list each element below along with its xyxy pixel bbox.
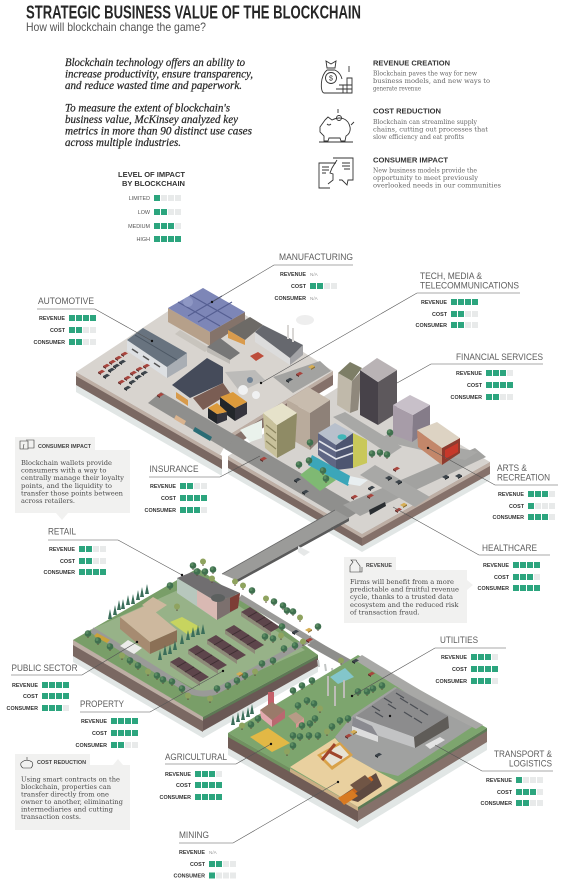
intro text block: Blockchain technology offers an ability to xyxy=(65,57,245,69)
level of impact legend: LIMITED xyxy=(129,196,150,202)
building: manufacturing blue roof plant xyxy=(168,288,245,346)
panel: property: REVENUE xyxy=(81,719,107,725)
island: residential and public sector xyxy=(73,568,355,738)
callout: revenue: ecosystem and the reduced risk xyxy=(350,601,459,609)
panel: transport and logistics: TRANSPORT & xyxy=(494,749,552,759)
car park: automotive vehicles xyxy=(98,352,150,391)
island: finance and city xyxy=(225,380,490,552)
panel: manufacturing: REVENUE xyxy=(280,272,306,278)
panel: manufacturing: N/A xyxy=(310,272,319,277)
residential trees xyxy=(85,558,321,703)
callout: consumer impact: CONSUMER IMPACT xyxy=(38,444,92,450)
intro text block: metrics in more than 90 distinct use cases xyxy=(65,126,253,138)
callout: cost reduction: intermediaries and cutting xyxy=(21,806,114,814)
callout: consumer impact: across retailers. xyxy=(21,497,75,505)
panel: transport and logistics: REVENUE xyxy=(486,778,512,784)
panel: agricultural: CONSUMER xyxy=(160,795,191,801)
panel: agricultural: COST xyxy=(176,783,192,789)
building: financial towers xyxy=(337,358,430,442)
level of impact legend xyxy=(118,170,186,243)
panel: transport and logistics: CONSUMER xyxy=(481,801,512,807)
leader lines xyxy=(11,265,558,843)
panel: transport and logistics: COST xyxy=(497,790,513,796)
cost reduction legend: chains, cutting out processes that xyxy=(373,126,488,134)
panel: financial services: CONSUMER xyxy=(451,395,482,401)
building: tan office and beige tower xyxy=(263,387,330,458)
building: hospital xyxy=(308,423,368,486)
consumer impact legend: overlooked needs in our communities xyxy=(373,182,502,190)
panel: tech, media and telecommunications: TELECOMMUNICATIONS xyxy=(420,280,519,290)
level of impact legend: BY BLOCKCHAIN xyxy=(122,179,185,188)
panel: agricultural: REVENUE xyxy=(165,772,191,778)
panel: utilities: UTILITIES xyxy=(440,635,478,645)
level of impact legend: LOW xyxy=(138,210,151,216)
intro text block: business value, McKinsey analyzed key xyxy=(65,114,239,126)
icon: money bag xyxy=(321,61,352,93)
panel: utilities: COST xyxy=(452,667,468,673)
housing rows xyxy=(170,607,280,686)
panel: manufacturing: MANUFACTURING xyxy=(279,252,353,262)
revenue creation legend: business models, and new ways to xyxy=(373,77,490,85)
bridge: city to residential xyxy=(222,510,349,583)
callout: revenue: REVENUE xyxy=(366,563,393,569)
building: dark warehouse xyxy=(172,358,230,410)
panel: public sector: CONSUMER xyxy=(7,706,38,712)
panel: manufacturing: N/A xyxy=(310,296,319,301)
callout: revenue: predictable and fruitful revenue xyxy=(350,586,459,594)
cost reduction legend: Blockchain can streamline supply xyxy=(373,118,477,126)
panel: manufacturing: CONSUMER xyxy=(275,296,306,302)
panel: mining: N/A xyxy=(209,850,218,855)
callout: cost reduction: COST REDUCTION xyxy=(37,760,86,766)
intro text block: and reduce wasted time and paperwork. xyxy=(65,80,242,92)
panel: healthcare xyxy=(478,543,540,592)
panel: insurance: INSURANCE xyxy=(150,464,198,474)
panel: public sector: COST xyxy=(23,694,39,700)
icon: money bag: $ xyxy=(329,76,333,82)
callout: consumer impact: transfer those points between xyxy=(21,490,124,498)
panel: retail: RETAIL xyxy=(48,526,76,536)
icon: consumer speech bubbles xyxy=(319,158,353,188)
panel: property: COST xyxy=(92,731,108,737)
callout: consumer impact xyxy=(15,437,130,520)
callout: consumer impact: Blockchain wallets provide xyxy=(21,459,112,467)
panel: insurance: CONSUMER xyxy=(145,508,176,514)
callout: revenue: cycle, thanks to a trusted data xyxy=(350,593,453,601)
level of impact legend: HIGH xyxy=(137,237,150,243)
building: logistics warehouse xyxy=(345,688,449,758)
panel: public sector xyxy=(7,663,78,712)
consumer impact legend: New business models provide the xyxy=(373,166,477,174)
mining machinery xyxy=(317,742,372,805)
callout: cost reduction: transaction costs. xyxy=(21,813,81,821)
panel: arts and recreation: CONSUMER xyxy=(493,515,524,521)
title: STRATEGIC BUSINESS VALUE OF THE BLOCKCHAIN xyxy=(26,2,361,22)
callout: consumer impact: points, and the liquidity to xyxy=(21,482,112,490)
callout: revenue: of transaction fraud. xyxy=(350,608,420,616)
panel: financial services: REVENUE xyxy=(456,371,482,377)
city trees and traffic xyxy=(174,415,462,515)
panel: arts and recreation xyxy=(493,463,555,521)
panel: public sector: PUBLIC SECTOR xyxy=(12,663,78,673)
panel: retail: COST xyxy=(60,559,76,565)
panel: automotive: COST xyxy=(50,328,66,334)
panel: public sector: REVENUE xyxy=(12,683,38,689)
intro text block: increase productivity, ensure transparency, xyxy=(65,68,253,80)
panel: healthcare: COST xyxy=(494,575,510,581)
panel: utilities: CONSUMER xyxy=(436,679,467,685)
panel: transport and logistics xyxy=(481,749,552,807)
panel: agricultural: AGRICULTURAL xyxy=(165,752,227,762)
panel: arts and recreation: COST xyxy=(509,504,525,510)
building: orange storage blocks xyxy=(208,392,247,424)
panel: arts and recreation: ARTS & xyxy=(497,463,527,473)
level of impact legend: LEVEL OF IMPACT xyxy=(118,170,186,179)
building: retail strip xyxy=(177,572,240,620)
panel: retail: CONSUMER xyxy=(44,570,75,576)
panel: automotive xyxy=(34,296,96,346)
consumer impact legend: opportunity to meet previously xyxy=(373,174,478,182)
panel: insurance xyxy=(145,464,207,514)
intro text block xyxy=(65,57,253,149)
panel: transport and logistics: LOGISTICS xyxy=(509,758,552,768)
panel: insurance: COST xyxy=(161,496,177,502)
intro text block: To measure the extent of blockchain's xyxy=(65,102,231,114)
intro text block: across multiple industries. xyxy=(65,137,181,149)
building: public sector school xyxy=(94,597,200,654)
panel: financial services: COST xyxy=(467,383,483,389)
revenue creation legend: Blockchain paves the way for new xyxy=(373,70,477,78)
revenue creation legend: generate revenue xyxy=(373,84,421,92)
callout: revenue xyxy=(344,557,473,623)
island: agriculture, mining, utilities and logistics xyxy=(228,655,487,829)
panel: financial services: FINANCIAL SERVICES xyxy=(456,352,543,362)
cost reduction legend: slow efficiency and eat profits xyxy=(373,133,465,141)
callout: revenue: Firms will benefit from a more xyxy=(350,578,454,586)
subtitle: How will blockchain change the game? xyxy=(26,20,206,34)
island: automotive and manufacturing xyxy=(76,288,333,476)
revenue creation legend xyxy=(373,58,490,92)
panel: tech, media and telecommunications: CONSUMER xyxy=(416,323,447,329)
consumer impact legend xyxy=(373,156,502,190)
consumer impact legend: CONSUMER IMPACT xyxy=(373,156,449,164)
building: factory with chimneys xyxy=(157,315,315,399)
panel: mining: CONSUMER xyxy=(174,874,205,880)
panel: tech, media and telecommunications: COST xyxy=(432,312,448,318)
panel: tech, media and telecommunications: TECH, MEDIA & xyxy=(420,271,482,281)
cost reduction legend: COST REDUCTION xyxy=(373,106,441,116)
revenue creation legend: REVENUE CREATION xyxy=(373,58,450,68)
panel: healthcare: CONSUMER xyxy=(478,586,509,592)
panel: manufacturing: COST xyxy=(291,284,307,290)
callout: cost reduction: blockchain, properties can xyxy=(21,783,112,791)
panel: retail xyxy=(44,526,106,576)
panel: mining: REVENUE xyxy=(179,850,205,856)
panel: insurance: REVENUE xyxy=(150,484,176,490)
panel: automotive: CONSUMER xyxy=(34,340,65,346)
cost reduction legend xyxy=(373,106,488,141)
panel: automotive: AUTOMOTIVE xyxy=(38,296,94,306)
isometric city illustration xyxy=(73,288,490,829)
building: automotive shed xyxy=(127,328,187,378)
level of impact legend: MEDIUM xyxy=(128,224,150,230)
panel: retail: REVENUE xyxy=(49,547,75,553)
panel: agricultural xyxy=(160,752,227,801)
panel: mining: MINING xyxy=(179,830,209,840)
panel: mining: COST xyxy=(190,862,206,868)
panel: manufacturing xyxy=(275,252,353,302)
callout: cost reduction xyxy=(15,754,130,830)
panel: healthcare: HEALTHCARE xyxy=(482,543,537,553)
panel: property xyxy=(76,699,138,749)
panel: arts and recreation: REVENUE xyxy=(498,492,524,498)
panel: utilities: REVENUE xyxy=(441,655,467,661)
lower island trees and farm xyxy=(231,658,385,756)
panel: property: CONSUMER xyxy=(76,743,107,749)
callout: consumer impact: centrally manage their loyalty xyxy=(21,474,124,482)
panel: automotive: REVENUE xyxy=(39,316,65,322)
callout: cost reduction: transfer directly from one xyxy=(21,790,109,798)
panel: healthcare: REVENUE xyxy=(483,563,509,569)
panel: utilities xyxy=(436,635,498,685)
panel: tech, media and telecommunications: REVENUE xyxy=(421,300,447,306)
panel: tech, media and telecommunications xyxy=(416,271,519,329)
panel: financial services xyxy=(451,352,543,401)
panel: arts and recreation: RECREATION xyxy=(497,472,550,482)
icon: piggy bank xyxy=(319,109,354,142)
callout: consumer impact: consumers with a way to xyxy=(21,466,106,474)
callout: cost reduction: owner to another, eliminating xyxy=(21,798,124,806)
callout: cost reduction: Using smart contracts on the xyxy=(21,776,120,784)
panel: property: PROPERTY xyxy=(80,699,124,709)
building: arts and recreation theatre xyxy=(417,422,460,465)
panel: mining xyxy=(174,830,236,880)
